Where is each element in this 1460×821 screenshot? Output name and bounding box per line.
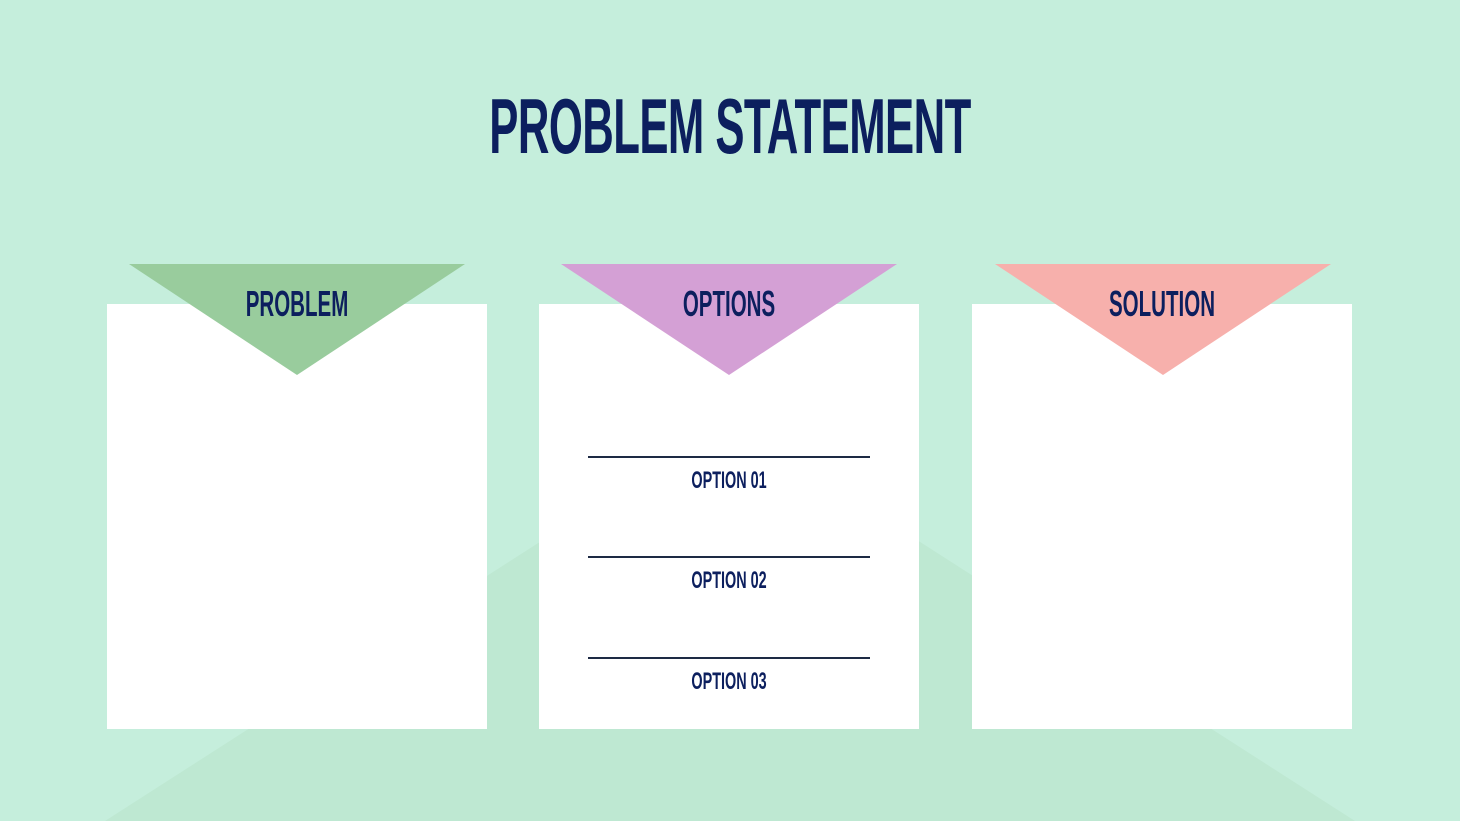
- panel: options: [539, 304, 919, 729]
- option 01: OPTION 01: [691, 467, 767, 494]
- heading: options: OPTIONS: [683, 283, 775, 324]
- panel: solution: [972, 304, 1352, 729]
- heading: solution: SOLUTION: [1109, 283, 1215, 324]
- panel: problem: [107, 304, 487, 729]
- option 03: OPTION 03: [691, 668, 767, 695]
- heading: problem: PROBLEM: [246, 283, 348, 324]
- title: PROBLEM STATEMENT: [489, 82, 971, 170]
- option 02: OPTION 02: [691, 567, 767, 594]
